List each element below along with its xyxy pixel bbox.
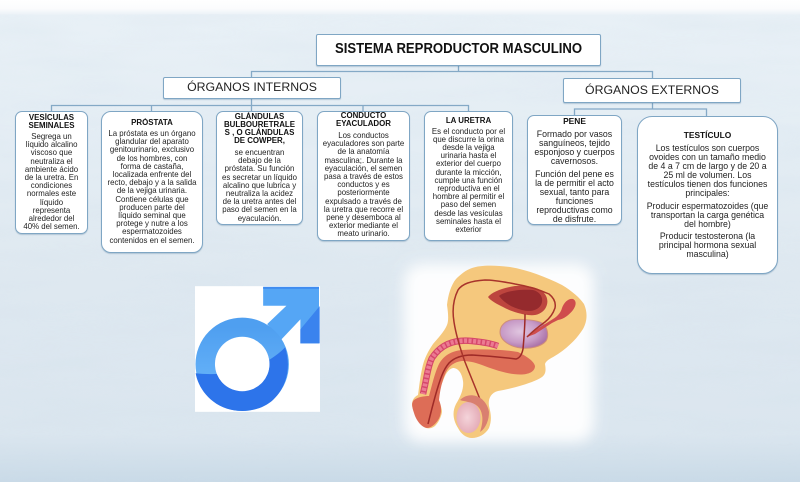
icon: male symbol bbox=[195, 286, 320, 412]
heading: órganos externos bbox=[563, 78, 741, 103]
text: glándulas bulbouretrales: se encuentran bbox=[235, 148, 284, 157]
text: pene función: de disfrute. bbox=[553, 214, 596, 224]
text: glándulas bulbouretrales: de la uretra antes del bbox=[223, 197, 296, 206]
text: próstata: recto, debajo y a la salida bbox=[108, 178, 196, 187]
text: pene descripción: esponjoso y cuerpos bbox=[534, 147, 615, 157]
text: la uretra: reproductiva en el bbox=[437, 184, 500, 193]
heading: vesículas seminales bbox=[28, 112, 75, 130]
heading: glándulas bulbouretrales: GLÁNDULAS bbox=[235, 112, 284, 120]
penis corpus bbox=[412, 349, 535, 428]
text: conducto eyaculador: pasa a través de estos bbox=[324, 172, 403, 181]
text: conducto eyaculador: Los conductos bbox=[338, 131, 389, 140]
panel: vesículas seminales bbox=[15, 111, 88, 234]
text: vesículas seminales: alrededor del bbox=[29, 214, 74, 223]
text: función espermatozoides: transportan la carga genética bbox=[651, 210, 764, 220]
text: vesículas seminales: de la uretra. En bbox=[25, 173, 78, 182]
text: testículo descripción: Los testículos son cuerpos bbox=[656, 142, 759, 152]
text: función testosterona: masculina) bbox=[686, 249, 729, 259]
body silhouette bbox=[412, 266, 587, 438]
text: vesículas seminales: Segrega un bbox=[31, 132, 72, 141]
text: próstata: líquido seminal que bbox=[118, 211, 186, 220]
text: testículo descripción: principales: bbox=[685, 188, 730, 198]
heading: conducto eyaculador: EYACULADOR bbox=[336, 119, 391, 128]
heading: glándulas bulbouretrales: DE COWPER, bbox=[234, 136, 285, 145]
text: glándulas bulbouretrales bbox=[222, 148, 297, 223]
text: vesículas seminales bbox=[23, 132, 80, 231]
text: testículo descripción: de 4 a 7 cm de largo y de 20 a bbox=[648, 161, 767, 171]
text: la uretra bbox=[432, 126, 505, 234]
heading: glándulas bulbouretrales bbox=[224, 112, 295, 145]
text: la uretra: desde las vesículas bbox=[434, 209, 503, 218]
text: la uretra: que discurre la orina bbox=[433, 135, 504, 144]
title: SISTEMA REPRODUCTOR MASCULINO bbox=[335, 41, 582, 57]
heading: pene: PENE bbox=[563, 116, 586, 126]
text: próstata: forma de castaña, bbox=[121, 162, 183, 171]
text: función testosterona bbox=[659, 231, 756, 259]
text: pene función: reproductivas como bbox=[536, 205, 613, 215]
text: conducto eyaculador: conductos y es bbox=[337, 180, 390, 189]
text: conducto eyaculador: meato urinario. bbox=[337, 229, 390, 238]
text: conducto eyaculador bbox=[323, 131, 404, 238]
text: próstata: localizada enfrente del bbox=[113, 170, 191, 179]
text: conducto eyaculador: de la anatomía bbox=[338, 147, 389, 156]
heading: vesículas seminales: VESÍCULAS bbox=[29, 112, 74, 122]
heading: próstata: PRÓSTATA bbox=[131, 118, 173, 126]
panel: pene bbox=[527, 115, 622, 225]
text: la uretra: seminales hasta el bbox=[436, 217, 501, 226]
text: testículo descripción: 25 ml de volumen. Los bbox=[663, 170, 752, 180]
text: próstata: espermatozoides bbox=[122, 227, 182, 236]
text: glándulas bulbouretrales: neutraliza la acidez bbox=[226, 189, 293, 198]
text: pene descripción: Formado por vasos bbox=[537, 128, 612, 138]
text: conducto eyaculador: expulsado a través de bbox=[325, 197, 402, 206]
heading: conducto eyaculador bbox=[336, 110, 391, 128]
text: próstata: glandular del aparato bbox=[115, 137, 189, 146]
text: la uretra: Es el conducto por el bbox=[432, 126, 505, 136]
text: la uretra: exterior del cuerpo bbox=[436, 159, 501, 168]
text: la uretra: urinaria hasta el bbox=[441, 151, 496, 160]
panel: la uretra bbox=[424, 111, 513, 241]
text: próstata: producen parte del bbox=[119, 203, 185, 212]
urethra bbox=[428, 314, 525, 424]
panel: próstata bbox=[101, 111, 203, 253]
text: próstata: La próstata es un órgano bbox=[108, 129, 196, 138]
text: próstata: de los hombres, con bbox=[117, 154, 187, 163]
text: pene función: Función del pene es bbox=[535, 168, 614, 178]
heading: testículo: TESTÍCULO bbox=[684, 130, 731, 140]
epididymis bbox=[460, 395, 489, 432]
seminal vesicle bbox=[527, 299, 576, 337]
title bbox=[316, 34, 601, 66]
prostate bbox=[500, 319, 548, 348]
panel: conducto eyaculador bbox=[317, 111, 410, 241]
text: la uretra: paso del semen bbox=[441, 200, 496, 209]
heading: órganos externos: ÓRGANOS EXTERNOS bbox=[585, 83, 719, 97]
heading: órganos internos bbox=[163, 77, 341, 99]
text: pene función: sexual, tanto para bbox=[540, 187, 609, 197]
text: testículo descripción: ovoides con un tamaño medio bbox=[649, 152, 766, 162]
heading: glándulas bulbouretrales: S , O GLÁNDULAS bbox=[225, 128, 294, 137]
text: vesículas seminales: neutraliza el bbox=[30, 157, 73, 166]
text: función testosterona: principal hormona sexual bbox=[659, 240, 756, 250]
text: la uretra: exterior bbox=[455, 225, 482, 234]
text: función testosterona: Producir testosterona (la bbox=[660, 231, 755, 241]
text: pene descripción: sanguíneos, tejido bbox=[539, 138, 610, 148]
heading: vesículas seminales: SEMINALES bbox=[28, 121, 75, 130]
text: vesículas seminales: líquido bbox=[40, 198, 63, 207]
text: pene función: funciones bbox=[556, 196, 593, 206]
text: glándulas bulbouretrales: alcalino que lubrica y bbox=[223, 181, 296, 190]
text: función espermatozoides: Producir espermatozoides (que bbox=[647, 200, 768, 210]
text: la uretra: durante la micción, bbox=[436, 168, 501, 177]
text: conducto eyaculador: exterior mediante el bbox=[329, 221, 398, 230]
text: conducto eyaculador: pene y desemboca al bbox=[326, 213, 401, 222]
text: próstata: genitourinario, exclusivo bbox=[110, 145, 194, 154]
text: vesículas seminales: condiciones bbox=[31, 181, 72, 190]
heading: conducto eyaculador: CONDUCTO bbox=[341, 110, 386, 120]
text: testículo descripción: testículos tienen dos funciones bbox=[648, 179, 767, 189]
text: vesículas seminales: normales este bbox=[27, 189, 76, 198]
text: pene función bbox=[535, 168, 614, 224]
text: glándulas bulbouretrales: eyaculación. bbox=[238, 214, 281, 223]
text: vesículas seminales: 40% del semen. bbox=[23, 222, 80, 231]
text: próstata: protege y nutre a los bbox=[116, 219, 188, 228]
text: conducto eyaculador: la uretra que recorre el bbox=[324, 205, 403, 214]
text: próstata: de la vejiga urinaria. bbox=[117, 186, 187, 195]
text: conducto eyaculador: posteriormente bbox=[337, 188, 390, 197]
panel: glándulas bulbouretrales bbox=[216, 111, 303, 225]
text: conducto eyaculador: eyaculación, el semen bbox=[325, 164, 402, 173]
testis bbox=[456, 402, 480, 433]
text: pene descripción: cavernosos. bbox=[551, 156, 598, 166]
text: función espermatozoides bbox=[647, 200, 768, 229]
text: vesículas seminales: líquido alcalino bbox=[26, 140, 77, 149]
text: conducto eyaculador: masculina;. Durante la bbox=[324, 156, 403, 165]
text: próstata: Contiene células que bbox=[115, 195, 189, 204]
text: próstata bbox=[108, 129, 196, 245]
heading: glándulas bulbouretrales: BULBOURETRALE bbox=[224, 120, 295, 129]
text: vesículas seminales: ambiente ácido bbox=[25, 165, 78, 174]
text: la uretra: cumple una función bbox=[434, 176, 503, 185]
text: vesículas seminales: representa bbox=[33, 206, 70, 215]
text: la uretra: desde la vejiga bbox=[442, 143, 495, 152]
text: vesículas seminales: viscoso que bbox=[31, 148, 72, 157]
text: glándulas bulbouretrales: próstata. Su función bbox=[225, 164, 294, 173]
text: conducto eyaculador: eyaculadores son parte bbox=[323, 139, 404, 148]
text: próstata: contenidos en el semen. bbox=[109, 236, 195, 245]
text: testículo descripción bbox=[648, 142, 768, 198]
bladder bbox=[488, 286, 547, 315]
text: pene función: la de permitir el acto bbox=[535, 178, 614, 188]
text: la uretra: hombre al permitir el bbox=[433, 192, 504, 201]
heading: órganos internos: ÓRGANOS INTERNOS bbox=[187, 80, 317, 94]
text: función espermatozoides: del hombre) bbox=[684, 219, 731, 229]
text: glándulas bulbouretrales: es secretar un líquido bbox=[222, 173, 297, 182]
text: pene descripción bbox=[534, 128, 615, 166]
vas deferens bbox=[453, 280, 555, 402]
text: glándulas bulbouretrales: debajo de la bbox=[238, 156, 281, 165]
corpus cavernosum bbox=[423, 341, 498, 394]
text: glándulas bulbouretrales: paso del semen en la bbox=[222, 205, 297, 214]
panel: testículo bbox=[637, 116, 778, 274]
heading: la uretra: LA URETRA bbox=[446, 116, 491, 124]
